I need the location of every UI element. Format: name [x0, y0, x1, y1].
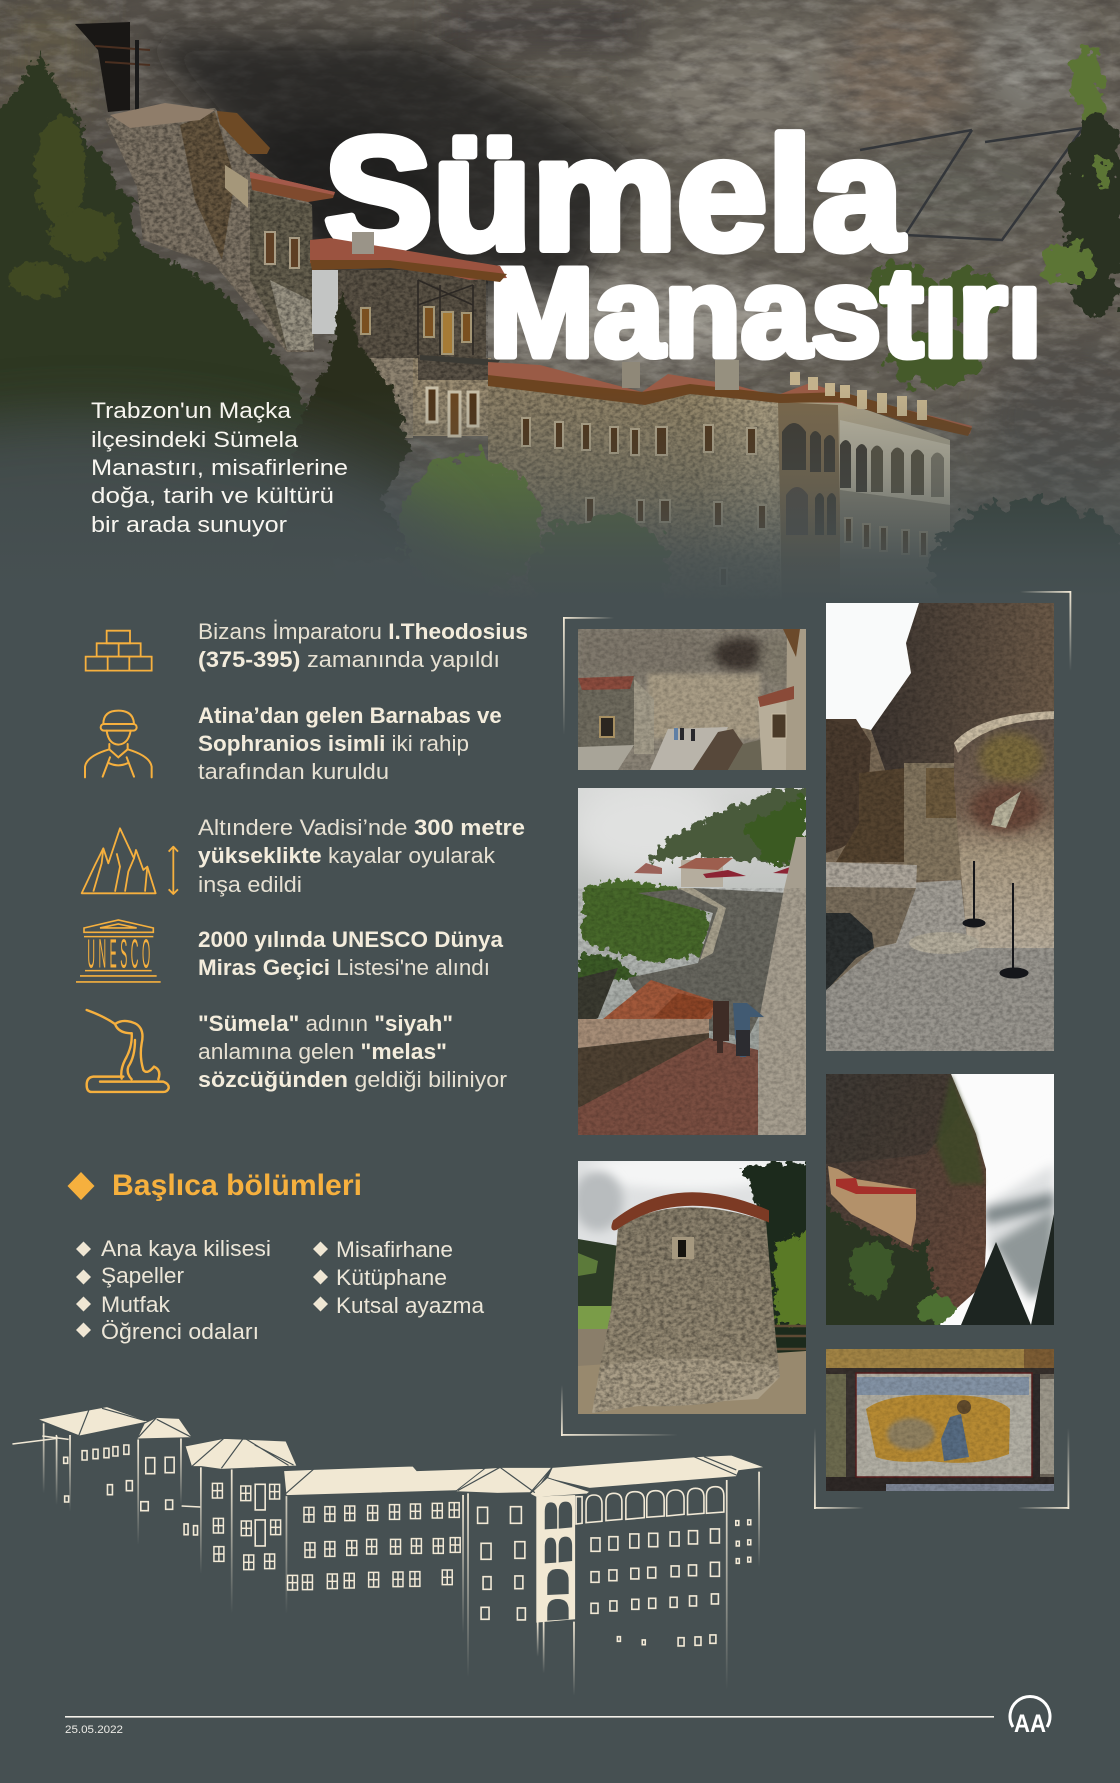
icon: AA logo: AA: [1014, 1710, 1046, 1738]
windows: [522, 418, 927, 586]
fact 1: Bizans İmparatoru I.Theodosius: [198, 619, 528, 644]
title: Manastırı: [489, 242, 1042, 383]
lower block: [413, 358, 491, 436]
heading: main sections: Başlıca bölümleri: [112, 1169, 362, 1202]
facts list: (375-395) zamanında yapıldı: [198, 647, 500, 672]
fade to background: [0, 398, 422, 550]
upper house: [338, 270, 486, 360]
footer: [65, 1696, 1050, 1738]
sections list: Kütüphane: [336, 1265, 447, 1290]
photo: monastery courtyard with fresco apse: [826, 603, 1054, 1051]
sections list: Öğrenci odaları: [101, 1319, 259, 1344]
title: Sümela: [324, 104, 904, 283]
chimneys: [622, 360, 927, 420]
facts list: [76, 619, 528, 1092]
facts list: Miras Geçici Listesi'ne alındı: [198, 955, 490, 980]
photo: tower with tile roof: [578, 1161, 806, 1414]
title: [324, 104, 1042, 383]
photo: foggy stairs: [578, 788, 806, 1135]
sections list: Misafirhane: [336, 1237, 453, 1262]
sections list: [76, 1236, 485, 1344]
facts list: sözcüğünden geldiği biliniyor: [198, 1067, 507, 1092]
corner brackets around photos: [561, 591, 1071, 1509]
rockfall nets: [860, 128, 1083, 240]
sections list: Mutfak: [101, 1292, 171, 1317]
roofs: [37, 1407, 765, 1497]
footer: 25.05.2022: [65, 1724, 123, 1736]
fact 2: Atina’dan gelen Barnabas ve: [198, 703, 502, 728]
intro text: [91, 398, 348, 537]
cliff door: [75, 22, 130, 112]
main roof: [488, 362, 972, 434]
intro text: Trabzon'un Maçka: [91, 398, 292, 423]
intro text: Manastırı, misafirlerine: [91, 455, 348, 480]
main wall: [488, 386, 950, 566]
facts list: tarafından kuruldu: [198, 759, 389, 784]
icon: UNESCO: [76, 920, 161, 982]
hero foreground: buildings and trees: [0, 22, 1120, 760]
windows: [212, 1483, 460, 1590]
fact 5: "Sümela" adının "siyah": [198, 1011, 453, 1036]
illustration: monastery line drawing: [12, 1407, 765, 1696]
fact 3: Altındere Vadisi’nde 300 metre: [198, 815, 525, 840]
icon: melas torch: [87, 1010, 169, 1092]
hero photo: monastery on the cliff: [0, 0, 1120, 532]
facts list: anlamına gelen "melas": [198, 1039, 447, 1064]
dark rock overhang: [150, 40, 640, 300]
icon: UNESCO: UNESCO: [87, 932, 150, 977]
intro text: doğa, tarih ve kültürü: [91, 483, 334, 508]
fading wall lines: [43, 1423, 760, 1696]
sections list: Şapeller: [101, 1263, 184, 1288]
sections list: Kutsal ayazma: [336, 1293, 485, 1318]
icon: mountain and arrow: [82, 828, 178, 894]
icon: monk: [85, 711, 152, 777]
intro text: bir arada sunuyor: [91, 512, 287, 537]
photo: courtyard under rock: [578, 629, 806, 770]
icon: AA logo: [1010, 1696, 1050, 1738]
right side greenery: [868, 49, 1120, 386]
left conifer: [0, 50, 308, 496]
photo: fresco: [826, 1349, 1054, 1491]
left tower: [105, 108, 314, 352]
facts list: Sophranios isimli iki rahip: [198, 731, 469, 756]
arched tower: [536, 1495, 575, 1623]
intro text: ilçesindeki Sümela: [91, 427, 299, 452]
sections list: Ana kaya kilisesi: [101, 1236, 271, 1261]
long arcade arches: [576, 1497, 582, 1524]
arcade: [778, 402, 840, 556]
green trees: [401, 444, 1120, 572]
fact 4: 2000 yılında UNESCO Dünya: [198, 927, 504, 952]
facts list: inşa edildi: [198, 872, 302, 897]
photo: distant monastery on cliff: [826, 1074, 1054, 1325]
facts list: yükseklikte kayalar oyularak: [198, 843, 496, 868]
icon: bricks: [86, 631, 152, 671]
